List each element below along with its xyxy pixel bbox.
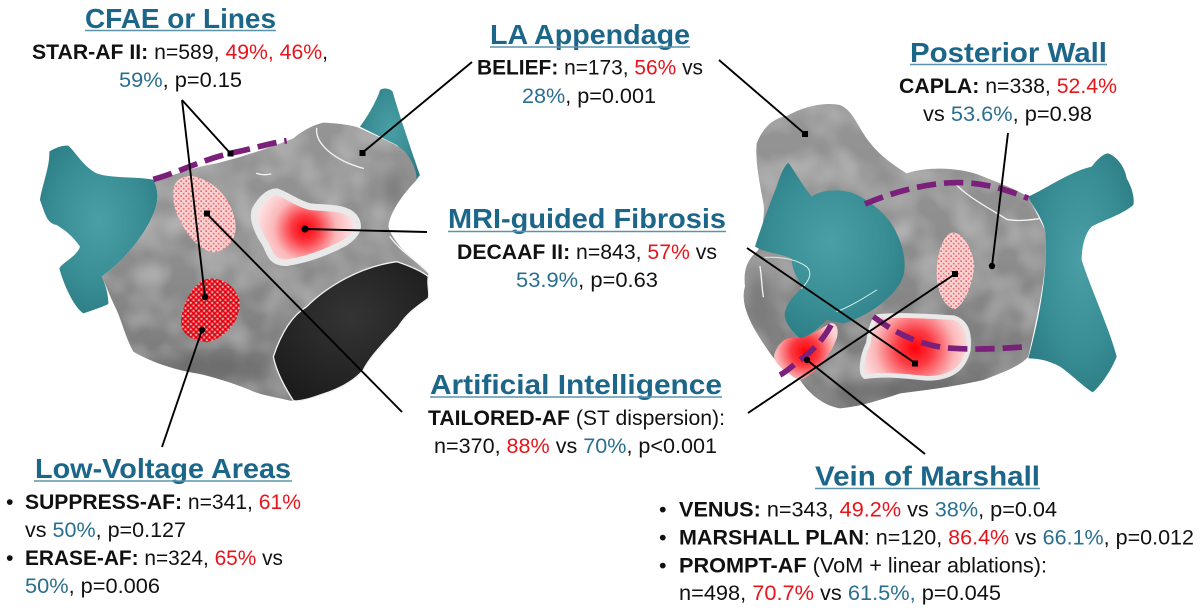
panel: MRI-guided Fibrosis: 53.9%, p=0.63 <box>516 268 658 292</box>
panel: CFAE or Lines: STAR-AF II: n=589, 49%, 46%, <box>32 40 328 64</box>
vein of Marshall hot spot <box>774 323 838 380</box>
panel: Artificial Intelligence: n=370, 88% vs 70%, p<0.001 <box>434 434 717 458</box>
panel: Artificial Intelligence: TAILORED-AF (ST dispersion): <box>428 406 725 430</box>
panel: LA Appendage: 28%, p=0.001 <box>522 84 656 108</box>
panel: Low-Voltage Areas: ERASE-AF: n=324, 65% vs <box>25 546 283 570</box>
fibrosis hot spot <box>862 316 969 378</box>
panel: MRI-guided Fibrosis: MRI-guided Fibrosis <box>448 203 726 234</box>
panel: MRI-guided Fibrosis <box>448 203 726 292</box>
panel: Posterior Wall: Posterior Wall <box>910 37 1107 68</box>
panel: CFAE or Lines: CFAE or Lines <box>85 3 276 34</box>
leader lines and markers <box>162 60 1008 454</box>
panel: Vein of Marshall: VENUS: n=343, 49.2% vs 38%, p=0.04 <box>679 498 1057 522</box>
panel: Artificial Intelligence: Artificial Intelligence <box>430 369 722 400</box>
grey atrial body <box>102 123 429 401</box>
panel: Vein of Marshall: PROMPT-AF (VoM + linear ablations): <box>679 554 1047 578</box>
panel: Low-Voltage Areas: SUPPRESS-AF: n=341, 61% <box>25 490 301 514</box>
panel: Low-Voltage Areas: vs 50%, p=0.127 <box>25 518 186 542</box>
teal left pulmonary veins <box>1028 153 1134 392</box>
dark mitral valve region <box>273 262 429 401</box>
panel: Low-Voltage Areas: 50%, p=0.006 <box>25 574 160 598</box>
panel: Posterior Wall <box>899 37 1117 126</box>
panel: MRI-guided Fibrosis: DECAAF II: n=843, 57% vs <box>457 240 717 264</box>
fibrosis hot spot <box>254 192 358 263</box>
purple dashed roof line <box>865 183 1028 204</box>
panel: Low-Voltage Areas: • <box>6 546 14 570</box>
panel: Vein of Marshall: n=498, 70.7% vs 61.5%, p=0.045 <box>679 581 1001 605</box>
panel: Vein of Marshall: Vein of Marshall <box>815 460 1040 492</box>
pale stippled CFAE area <box>173 176 236 252</box>
panel: LA Appendage: BELIEF: n=173, 56% vs <box>477 56 703 80</box>
panel: Vein of Marshall: • <box>659 498 667 522</box>
panel: Vein of Marshall: MARSHALL PLAN: n=120, 86.4% vs 66.1%, p=0.012 <box>679 526 1194 550</box>
panel: LA Appendage <box>477 19 703 108</box>
panel: LA Appendage: LA Appendage <box>490 19 690 50</box>
panel: Low-Voltage Areas <box>6 453 301 598</box>
panel: Low-Voltage Areas: Low-Voltage Areas <box>35 453 291 484</box>
panel: Vein of Marshall <box>659 460 1194 605</box>
purple dashed mitral line <box>780 325 831 375</box>
panel: Artificial Intelligence <box>428 369 725 458</box>
pale stippled AI-target area <box>937 232 974 309</box>
panel: CFAE or Lines <box>32 3 328 92</box>
grey atrial body <box>744 104 1046 408</box>
panel: Posterior Wall: CAPLA: n=338, 52.4% <box>899 74 1117 98</box>
panel: Vein of Marshall: • <box>659 554 667 578</box>
left atrium map: anterior view <box>40 88 429 401</box>
teal right pulmonary veins <box>755 163 905 338</box>
right atrium map: posterior view <box>744 104 1134 408</box>
dense stippled low-voltage area <box>181 279 240 342</box>
panel: Low-Voltage Areas: • <box>6 490 14 514</box>
teal left pulmonary veins <box>40 146 157 313</box>
purple dashed floor line <box>873 317 1028 349</box>
panel: Vein of Marshall: • <box>659 526 667 550</box>
purple dashed roof line <box>153 141 287 179</box>
teal upper right vein <box>360 88 420 179</box>
panel: Posterior Wall: vs 53.6%, p=0.98 <box>923 102 1092 126</box>
panel: CFAE or Lines: 59%, p=0.15 <box>119 68 242 92</box>
